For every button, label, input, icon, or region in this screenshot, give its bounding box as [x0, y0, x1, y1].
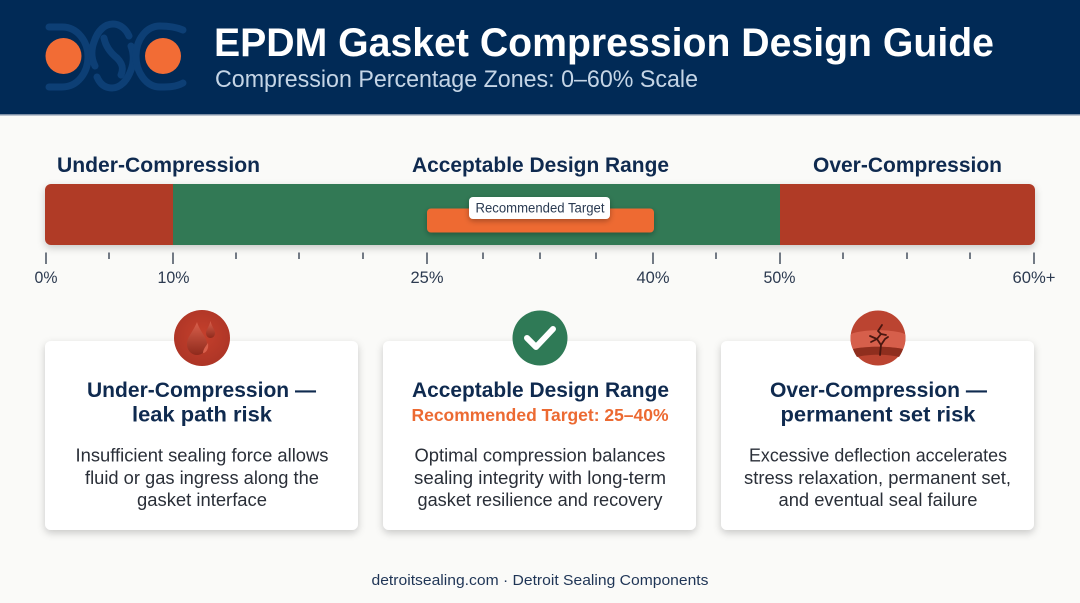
compression scale bar	[45, 184, 1035, 245]
icon: water drops	[174, 310, 230, 366]
panel: under-compression	[45, 341, 358, 530]
card body	[744, 446, 1011, 510]
icon: check mark	[512, 310, 568, 366]
scale labels: 0%	[34, 268, 58, 287]
card heading: Under-Compression —	[87, 378, 316, 402]
title: EPDM Gasket Compression Design Guide	[214, 21, 994, 65]
scale labels: 60%+	[1012, 268, 1056, 287]
footer: detroitsealing.com · Detroit Sealing Components	[372, 572, 708, 589]
card heading: Over-Compression —	[770, 378, 987, 402]
card body: gasket resilience and recovery	[418, 490, 662, 510]
card body	[76, 446, 328, 510]
zone heading: acceptable design range: Acceptable Design Range	[412, 153, 669, 177]
card heading: permanent set risk	[780, 402, 976, 426]
card body	[414, 446, 666, 510]
logo: DSC	[46, 24, 183, 88]
card body: sealing integrity with long-term	[414, 468, 666, 488]
zone heading: over-compression: Over-Compression	[813, 153, 1002, 177]
scale labels: 25%	[410, 268, 444, 287]
card body: Optimal compression balances	[414, 446, 666, 466]
icon: cracked gasket	[850, 310, 906, 366]
zone heading: under-compression: Under-Compression	[57, 153, 260, 177]
card body: Excessive deflection accelerates	[749, 446, 1007, 466]
card body: gasket interface	[137, 490, 267, 510]
card heading	[770, 378, 987, 426]
recommended target band	[427, 208, 654, 232]
card heading: leak path risk	[132, 402, 272, 426]
card body: fluid or gas ingress along the	[85, 468, 319, 488]
header band	[0, 0, 1080, 116]
scale labels: 40%	[636, 268, 670, 287]
recommended target label	[469, 197, 610, 219]
card body: and eventual seal failure	[778, 490, 978, 510]
scale ticks	[46, 252, 1034, 264]
subtitle: Compression Percentage Zones: 0–60% Scale	[215, 66, 698, 93]
recommended target text: Recommended Target: 25–40%	[412, 405, 669, 425]
card heading	[87, 378, 316, 426]
scale labels: 10%	[158, 268, 190, 287]
card body: Insufficient sealing force allows	[76, 446, 328, 466]
panel: acceptable design range	[383, 341, 696, 530]
card body: stress relaxation, permanent set,	[744, 468, 1011, 488]
scale labels: 50%	[764, 268, 796, 287]
panel: over-compression	[721, 341, 1034, 530]
scale labels	[34, 268, 1056, 287]
card heading: Acceptable Design Range	[412, 378, 669, 402]
recommended target label: Recommended Target	[476, 200, 605, 216]
